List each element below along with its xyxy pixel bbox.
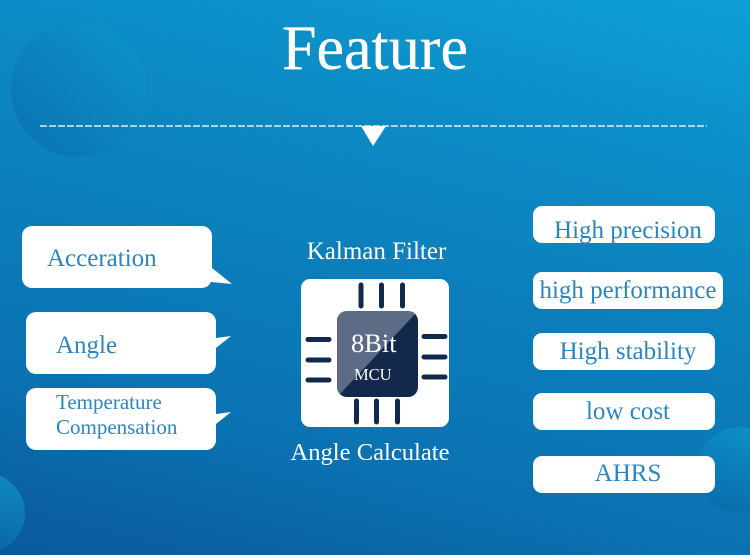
title: Feature: [282, 12, 468, 83]
feature: High stability: High stability: [560, 338, 697, 365]
feature: low cost: low cost: [586, 398, 670, 425]
dashed divider with arrow: [40, 126, 707, 146]
decorative circle right: [697, 427, 750, 513]
feature: High precision: High precision: [554, 217, 702, 244]
callout: Angle: Angle: [56, 332, 117, 359]
decorative circle bottom left: [0, 473, 25, 553]
heading: Kalman Filter: Kalman Filter: [307, 238, 447, 265]
icon: down arrow: [361, 126, 386, 146]
chip label: MCU: MCU: [354, 365, 392, 384]
callout: Temperature Compensation: Compensation: [56, 415, 178, 439]
panel: inputs: [22, 226, 232, 450]
feature: high performance: high performance: [539, 277, 717, 304]
panel: features: [533, 206, 723, 493]
feature: AHRS: AHRS: [595, 460, 661, 487]
icon: MCU chip: [301, 279, 449, 427]
callout: Acceration: [22, 226, 232, 288]
chip core: [337, 311, 418, 397]
callout: Acceration: Acceration: [47, 245, 157, 272]
decorative circle top left: [11, 21, 147, 157]
chip label: 8Bit: 8Bit: [351, 328, 397, 358]
feature: High precision: [533, 206, 715, 244]
chip pins: [308, 285, 445, 422]
callout: Temperature Compensation: [26, 388, 231, 450]
feature: High stability: [533, 333, 715, 370]
feature: low cost: [533, 393, 715, 430]
feature: AHRS: [533, 456, 715, 493]
callout: Angle: [26, 312, 231, 374]
callout: Temperature Compensation: Temperature: [56, 390, 162, 414]
feature: high performance: [533, 272, 723, 309]
caption: Angle Calculate: Angle Calculate: [290, 439, 450, 466]
